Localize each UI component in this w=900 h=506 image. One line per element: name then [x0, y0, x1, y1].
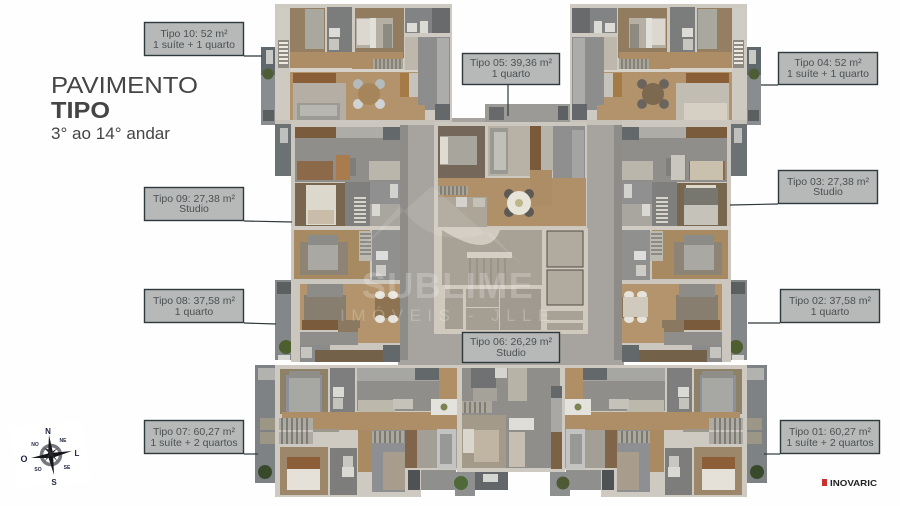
panel: Tipo 08 floor plan [275, 230, 400, 362]
panel: Tipo 04 floor plan [570, 4, 761, 125]
icon: compass rose: NO [31, 442, 39, 448]
callout: Tipo 06: Tipo 06: 26,29 m² [470, 336, 552, 348]
icon: compass rose: NE [60, 438, 67, 444]
watermark: Sublime Imóveis: IMÓVEIS - JLLE [340, 306, 556, 325]
callout: Tipo 04: 1 suíte + 1 quarto [787, 68, 869, 80]
icon: compass rose: L [75, 449, 80, 458]
panel: Tipo 02 floor plan [622, 230, 747, 362]
callout: Tipo 04 [761, 52, 878, 85]
watermark: Sublime Imóveis [340, 186, 556, 325]
callout: Tipo 04: Tipo 04: 52 m² [794, 57, 862, 69]
callout: Tipo 03 [730, 170, 878, 205]
icon: compass rose: SO [34, 467, 42, 473]
icon: compass rose: N [45, 427, 51, 436]
panel: Tipo 05 floor plan [434, 104, 587, 229]
panel: Tipo 10 floor plan [261, 4, 452, 125]
callout: Tipo 03: Tipo 03: 27,38 m² [787, 176, 869, 188]
callout: Tipo 10 [144, 22, 262, 56]
callout: Tipo 07: Tipo 07: 60,27 m² [153, 426, 235, 438]
title: 3° ao 14° andar [51, 125, 171, 143]
callout: Tipo 07: 1 suíte + 2 quartos [150, 437, 238, 449]
panel: Tipo 09 floor plan [275, 120, 400, 232]
callout: Tipo 06: Studio [496, 347, 526, 359]
callout: Tipo 01 [764, 420, 880, 454]
title: PAVIMENTO [51, 72, 198, 98]
callout: Tipo 09 [144, 188, 292, 222]
icon: compass rose: S [51, 478, 57, 487]
callout: Tipo 09: Studio [179, 203, 209, 215]
icon: compass rose [10, 420, 90, 488]
callout: Tipo 01: 1 suíte + 2 quartos [786, 437, 874, 449]
central corridors and building base [398, 118, 624, 368]
callout: Tipo 08: 1 quarto [175, 306, 213, 318]
panel: Tipo 03 floor plan [622, 120, 747, 232]
icon: compass rose: SE [64, 465, 71, 471]
callout: Tipo 07 [144, 420, 258, 454]
callout: Tipo 02: Tipo 02: 37,58 m² [789, 295, 871, 307]
title: TIPO [51, 97, 110, 123]
panel: central core [434, 228, 588, 334]
callout: Tipo 02: 1 quarto [811, 306, 849, 318]
callout: Tipo 08 [144, 290, 276, 324]
callout: Tipo 09: Tipo 09: 27,38 m² [153, 193, 235, 205]
logo: Inovaric: INOVARIC [830, 478, 877, 488]
callout: Tipo 10: Tipo 10: 52 m² [160, 28, 228, 40]
panel: Tipo 06 floor plan [454, 365, 570, 496]
title [51, 72, 198, 143]
callout: Tipo 06 [462, 332, 560, 362]
icon: compass rose: O [20, 454, 28, 464]
watermark: Sublime Imóveis: SUBLIME [362, 265, 534, 306]
callout: Tipo 01: Tipo 01: 60,27 m² [789, 426, 871, 438]
callout: Tipo 05: Tipo 05: 39,36 m² [470, 57, 552, 69]
callout: Tipo 02 [748, 290, 880, 323]
callout: Tipo 10: 1 suíte + 1 quarto [153, 39, 235, 51]
callout: Tipo 05: 1 quarto [492, 68, 530, 80]
panel: Tipo 01 floor plan [564, 365, 767, 497]
callout: Tipo 03: Studio [813, 186, 843, 198]
callout: Tipo 05 [462, 54, 560, 116]
panel: Tipo 07 floor plan [255, 365, 458, 497]
callout: Tipo 08: Tipo 08: 37,58 m² [153, 295, 235, 307]
